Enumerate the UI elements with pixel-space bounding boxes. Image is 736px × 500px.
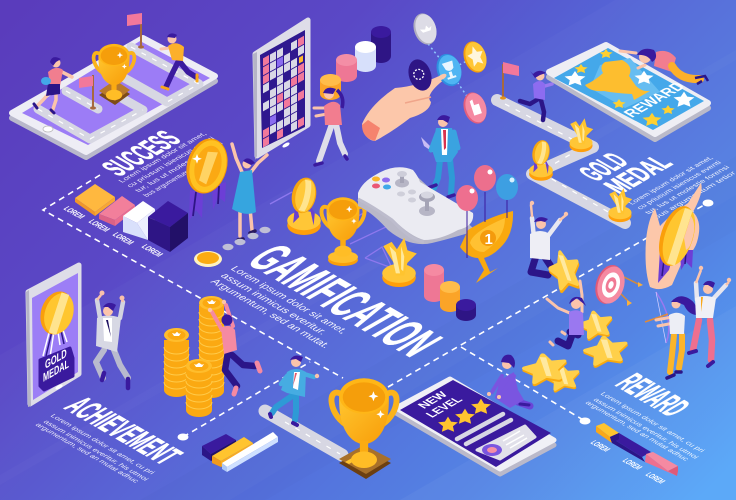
icon: gold 1 trophy	[460, 211, 513, 283]
text: gold medal description: Lorem ipsum dolor sit amet,	[628, 155, 715, 206]
icon: game controller	[358, 167, 473, 244]
title: success: SUCCESS	[94, 126, 188, 181]
icon: gold 1 trophy: 1	[484, 231, 493, 248]
text: success description: bus argumentum	[142, 170, 192, 198]
text: gamification description: Lorem ipsum dolor sit amet,	[227, 265, 350, 336]
road: achievement path	[265, 411, 342, 455]
icon: big pointing hand	[362, 74, 444, 141]
panel: success phone	[12, 38, 215, 157]
text: gold medal description: tur, lus ut molestie forensi	[644, 165, 732, 216]
text: reward description: Lorem ipsum dolor sit amet, cu pri	[598, 391, 706, 454]
title: gold medal: GOLD	[571, 148, 636, 186]
text: achievement description	[33, 413, 156, 484]
tablet: gold medal: GOLD	[45, 345, 67, 372]
person: woman in blue dress	[232, 144, 267, 240]
person: running man in blue	[270, 356, 319, 425]
labels: success lorem	[61, 205, 165, 258]
tablet: puzzle grid	[253, 20, 308, 160]
labels: reward lorem: LOREM	[588, 439, 613, 453]
panel: reward phone: REWARD	[621, 80, 689, 120]
panel: reward phone	[549, 45, 708, 139]
icon: center trophy	[322, 197, 364, 266]
text: achievement description: assum inimicus everitur, his utmoi	[41, 419, 150, 482]
tablet: gold medal: MEDAL	[43, 356, 69, 385]
road: gold medal path	[497, 100, 625, 223]
icon: balloons	[456, 165, 518, 258]
text: gold medal description: cu priusum isienicus eventi	[636, 160, 724, 211]
chart: center cylinders	[424, 264, 476, 321]
icon: bolt piece on disc	[382, 238, 417, 287]
title: gold medal: MEDAL	[597, 151, 680, 199]
icon: large gold star	[547, 249, 583, 292]
title: gold medal	[571, 148, 680, 199]
text: success description	[118, 131, 234, 198]
chart: achievement bars	[202, 432, 278, 472]
person: woman climbing coins	[208, 300, 260, 394]
person: jumping man in white	[530, 201, 568, 275]
text: reward description	[583, 391, 706, 462]
icons: gold stars	[523, 309, 628, 392]
person: archer woman	[645, 292, 697, 378]
icon: big gold medal	[180, 134, 234, 221]
icon: flag on road	[500, 62, 519, 100]
text: gold medal description	[628, 155, 736, 220]
person: woman lying on phone	[620, 49, 708, 84]
labels: reward lorem	[588, 439, 668, 485]
panel: new level phone: NEW	[414, 389, 451, 411]
icon: flag front	[79, 75, 96, 110]
person: kneeling woman	[487, 355, 530, 408]
labels: success lorem: LOREM	[61, 205, 87, 220]
person: runner in yellow	[161, 33, 197, 89]
person: businessman with tablet	[421, 115, 458, 197]
icon: gold pieces on road	[529, 118, 593, 181]
chart: cylinders	[320, 26, 391, 100]
person: jumping woman	[547, 281, 586, 346]
icon: success trophy	[94, 44, 134, 105]
title: gamification: GAMIFICATION	[235, 236, 455, 364]
chart: success blocks	[75, 184, 188, 252]
icon: target with arrows	[591, 261, 643, 308]
person: running woman	[520, 71, 552, 120]
icon: flag back	[127, 13, 144, 49]
text: reward description: assum inimicus everitur, his utmoi	[591, 397, 700, 460]
text: gamification description: assum inimicus everitur.	[217, 272, 329, 337]
person: cheering man	[689, 266, 731, 366]
labels: reward lorem: LOREM	[620, 457, 645, 471]
icons: coin stacks	[164, 296, 224, 417]
icon: hand holding medal	[646, 183, 702, 289]
icons: gamification badges	[405, 10, 490, 127]
panel: new level phone: LEVEL	[422, 394, 466, 420]
person: cheering man in grey	[96, 290, 128, 388]
text: achievement description: Lorem ipsum dolor sit amet, cu pri	[48, 413, 156, 476]
person: runner with bag	[34, 57, 72, 113]
labels: success lorem: LOREM	[139, 243, 165, 258]
person: woman with ponytail	[314, 88, 347, 165]
dashed connector lines	[43, 175, 714, 440]
tablet: gold medal	[26, 265, 79, 407]
labels: reward lorem: LOREM	[643, 471, 668, 485]
icon: gold coin	[194, 227, 270, 267]
icon: bolt over title	[608, 188, 632, 222]
chart: reward bar	[596, 423, 678, 476]
labels: success lorem: LOREM	[86, 218, 112, 233]
text: gamification description: Argumentum, sed an mutat.	[207, 278, 332, 350]
labels: success lorem: LOREM	[110, 231, 136, 246]
text: gold medal description: bus argumentum tetior,	[652, 170, 736, 220]
text: reward description: argumentum, sed an mutat adhuc	[583, 400, 690, 462]
text: success description: cu priusum isienicus eventi	[126, 136, 217, 189]
text: success description: tur, lus ut molestie forensi	[134, 141, 226, 194]
panel: new level phone	[396, 379, 554, 474]
text: success description: Lorem ipsum dolor sit amet,	[118, 131, 209, 184]
icon: medal on disc	[287, 175, 321, 235]
icon: main gold trophy	[331, 378, 397, 479]
text: achievement description: argumentum, sed an mutat adhuc	[33, 422, 140, 484]
